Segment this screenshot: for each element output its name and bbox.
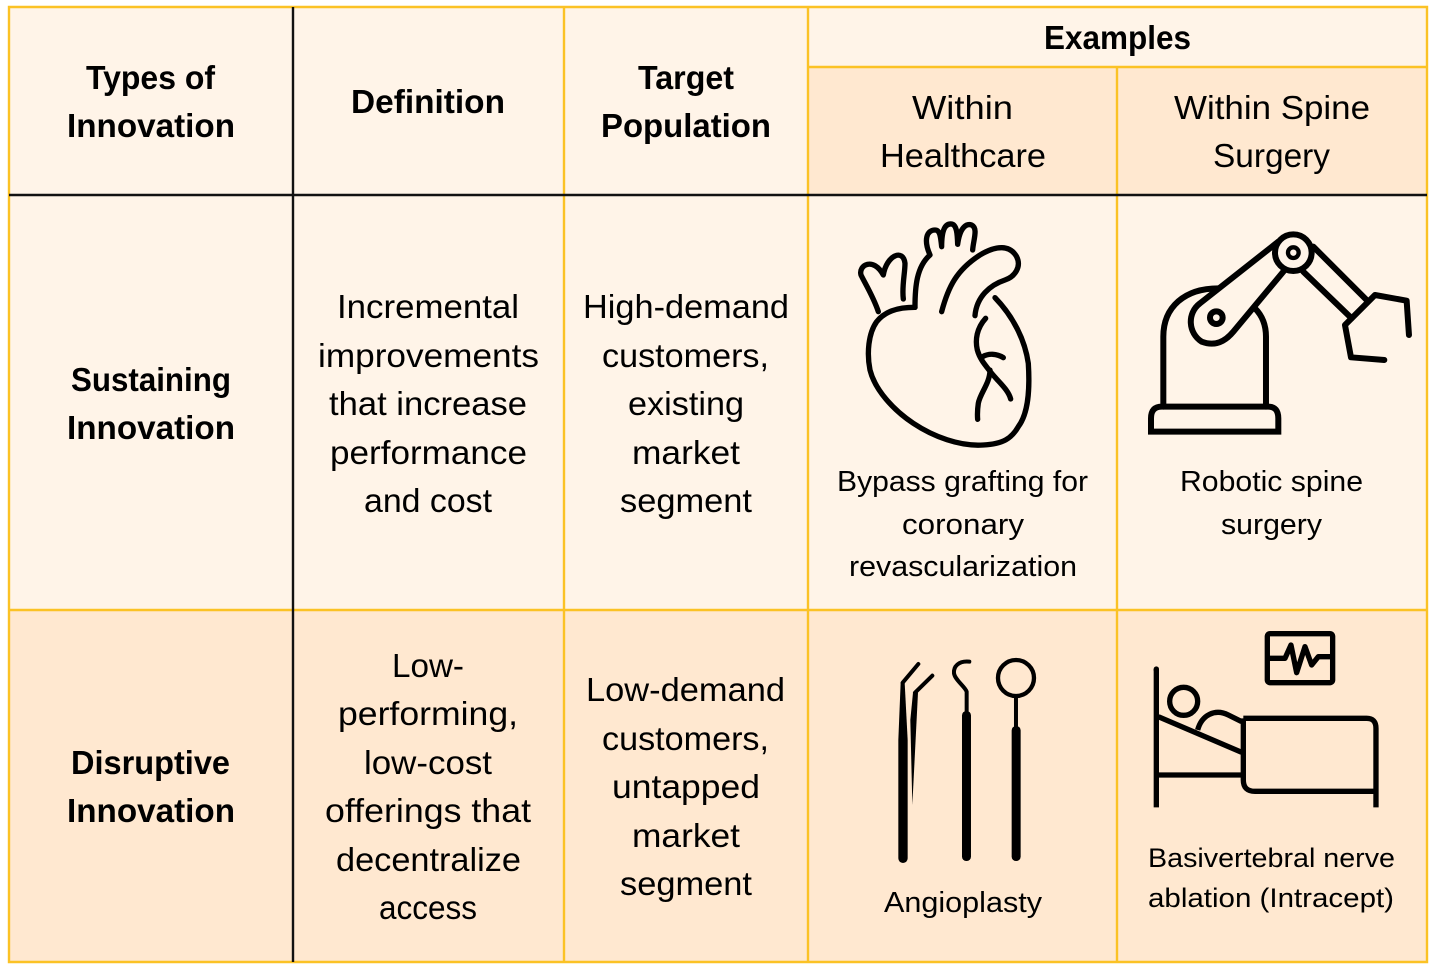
text: sustaining target population: market: [632, 434, 740, 471]
caption: bypass grafting: Bypass grafting for: [837, 466, 1088, 498]
text: disruptive target population: market: [632, 817, 740, 854]
text: sustaining definition: performance: [330, 434, 527, 471]
text: disruptive target population: Low-demand: [586, 671, 785, 708]
subheading: within spine surgery: Surgery: [1213, 137, 1330, 174]
text: disruptive target population: customers,: [602, 720, 769, 757]
heading: target population: [601, 59, 771, 144]
caption: bypass grafting: [837, 466, 1088, 583]
text: sustaining definition: and cost: [364, 482, 492, 519]
row heading: sustaining innovation: [67, 361, 235, 446]
text: disruptive definition: offerings that: [325, 792, 531, 829]
text: sustaining definition: [318, 288, 539, 519]
caption: robotic spine surgery: [1180, 466, 1363, 541]
icon: heart: [861, 224, 1029, 445]
heading: examples: Examples: [1044, 19, 1191, 56]
text: sustaining target population: existing: [628, 385, 744, 422]
text: disruptive definition: decentralize: [336, 841, 521, 878]
caption: angioplasty: Angioplasty: [884, 887, 1043, 919]
text: sustaining definition: improvements: [318, 337, 539, 374]
text: disruptive definition: access: [379, 889, 477, 926]
row heading: disruptive innovation: Innovation: [67, 792, 235, 829]
heading: types of innovation: [67, 59, 235, 144]
text: sustaining definition: Incremental: [337, 288, 519, 325]
caption: basivertebral nerve ablation: [1148, 843, 1395, 913]
row heading: disruptive innovation: [67, 744, 235, 829]
caption: robotic spine surgery: Robotic spine: [1180, 466, 1363, 498]
text: sustaining target population: [583, 288, 789, 519]
subheading: within healthcare: [880, 89, 1046, 174]
heading: definition: Definition: [351, 83, 505, 120]
text: sustaining definition: that increase: [329, 385, 527, 422]
text: disruptive target population: segment: [620, 865, 752, 902]
text: disruptive definition: Low-: [392, 647, 464, 684]
icon: dental-style instruments: [898, 660, 1034, 863]
subheading: within spine surgery: [1174, 89, 1370, 174]
subheading: within spine surgery: Within Spine: [1174, 89, 1370, 126]
caption: basivertebral nerve ablation: Basivertebral nerve: [1148, 843, 1395, 873]
text: sustaining target population: High-demand: [583, 288, 789, 325]
heading: types of innovation: Types of: [86, 59, 216, 96]
row heading: disruptive innovation: Disruptive: [71, 744, 230, 781]
row heading: sustaining innovation: Innovation: [67, 409, 235, 446]
text: sustaining target population: segment: [620, 482, 752, 519]
text: disruptive definition: [325, 647, 531, 926]
text: disruptive target population: untapped: [612, 768, 760, 805]
heading: target population: Population: [601, 107, 771, 144]
heading: target population: Target: [638, 59, 734, 96]
heading: types of innovation: Innovation: [67, 107, 235, 144]
icon: patient in bed with monitor: [1156, 634, 1376, 807]
text: disruptive definition: low-cost: [364, 744, 492, 781]
icon: robotic arm: [1151, 234, 1409, 432]
text: disruptive definition: performing,: [338, 695, 518, 732]
row heading: sustaining innovation: Sustaining: [71, 361, 231, 398]
caption: bypass grafting: revascularization: [849, 551, 1077, 583]
caption: robotic spine surgery: surgery: [1221, 509, 1323, 541]
caption: bypass grafting: coronary: [902, 509, 1025, 541]
subheading: within healthcare: Healthcare: [880, 137, 1046, 174]
subheading: within healthcare: Within: [912, 89, 1013, 126]
text: disruptive target population: [586, 671, 785, 902]
text: sustaining target population: customers,: [602, 337, 769, 374]
caption: basivertebral nerve ablation: ablation (Intracept): [1148, 883, 1394, 913]
